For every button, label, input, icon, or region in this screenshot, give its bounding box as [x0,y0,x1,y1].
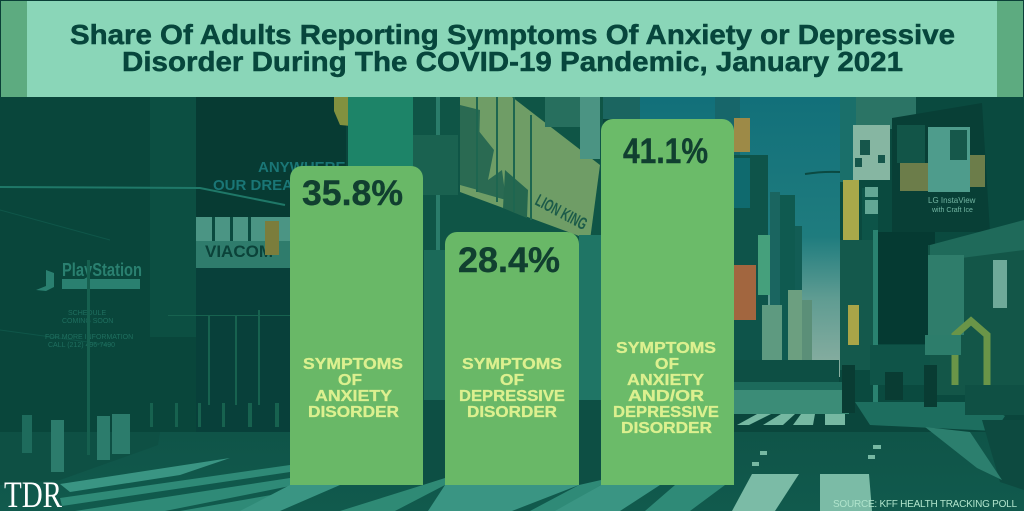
label: OF [338,372,362,389]
sidewalk corner [0,432,160,485]
sky [640,97,845,377]
lion king building [413,97,603,407]
value: 35.8%: 35.8% [302,174,403,213]
street planter [982,420,1024,490]
label: SYMPTOMS [462,356,562,373]
people and cyclist [842,365,937,413]
title banner [1,1,1023,97]
lion king building: LION KING [532,191,590,234]
playstation theater sign: FOR MORE INFORMATION [45,334,133,341]
bar: symptoms of anxiety and/or depressive disorder, 41.1% [601,119,734,485]
billboard sign text: VIACOM [205,242,273,261]
banner body [27,1,997,97]
label: DEPRESSIVE [613,404,719,421]
label [613,340,719,437]
road [0,432,1024,511]
playstation theater sign: COMING SOON [62,318,113,325]
label [459,356,565,421]
right buildings and billboards: LG InstaView [928,196,976,205]
traffic light [334,97,368,127]
billboard sign text [196,159,346,268]
playstation theater sign: SCHEDULE [68,310,106,317]
label: DEPRESSIVE [459,388,565,405]
traffic light on left arm [265,221,279,255]
label: DISORDER [308,404,399,421]
crosswalk stripes [60,414,881,511]
bar: symptoms of anxiety disorder, 35.8% [290,166,423,485]
right buildings and billboards [840,97,1024,405]
distant skyscrapers [715,97,839,382]
right buildings and billboards: with Craft Ice [931,207,973,214]
label: SYMPTOMS [303,356,403,373]
label: OF [655,356,679,373]
label: DISORDER [467,404,557,421]
label: ANXIETY [315,388,392,405]
left building [0,97,346,432]
billboard sign text: ANYWHERE [258,159,346,176]
label: AND/OR [628,388,705,405]
value: 28.4%: 28.4% [458,241,560,280]
sign post and bollards [22,260,130,472]
label: OF [500,372,524,389]
bar: symptoms of depressive disorder, 28.4% [445,232,579,485]
title text: Share Of Adults Reporting Symptoms Of Anxiety or Depressive [70,19,955,50]
playstation theater sign [36,260,142,349]
billboard sign text: OUR DREAMS [213,177,316,194]
label: SYMPTOMS [616,340,716,357]
label: DISORDER [621,420,712,437]
label: ANXIETY [627,372,704,389]
title text [70,19,955,77]
label [303,356,403,421]
playstation theater sign: PlayStation [62,260,142,280]
title text: Disorder During The COVID-19 Pandemic, January 2021 [122,46,903,77]
source note: SOURCE: KFF HEALTH TRACKING POLL [833,499,1017,510]
scaffolding [150,310,290,427]
playstation theater sign: CALL (212) 496-7490 [48,342,115,349]
street lamp arm [805,172,872,176]
value: 41.1%: 41.1% [623,132,708,171]
banner side accents [1,1,1023,97]
